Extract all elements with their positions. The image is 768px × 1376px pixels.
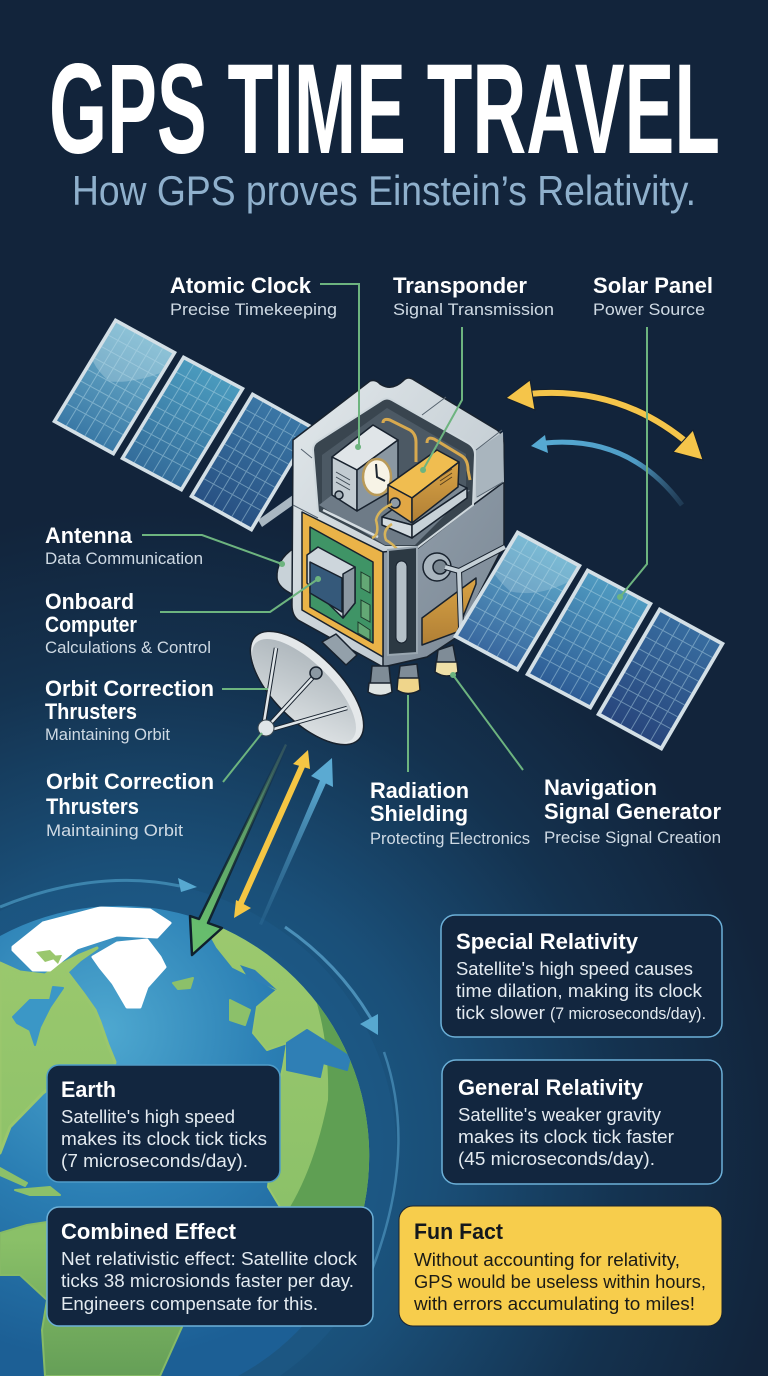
label: solar panel: [593, 273, 713, 319]
line: thrusters lower: [223, 733, 262, 782]
tube: [396, 561, 407, 643]
earth glow: [0, 510, 768, 1376]
panel: general relativity: [442, 1060, 722, 1184]
subtitle: How GPS proves Einstein’s Relativity.: [72, 167, 696, 214]
sea: baltic: [240, 965, 277, 990]
bay inner wall: [322, 408, 466, 505]
label: navigation signal generator: Navigation: [544, 775, 657, 800]
panel: fun fact: [399, 1206, 722, 1326]
label: antenna: [45, 523, 203, 568]
label: orbit correction thrusters lower: Maintaining Orbit: [46, 821, 183, 840]
circuit board: [302, 512, 383, 657]
dish: [232, 613, 382, 763]
panel: earth: makes its clock tick ticks: [61, 1128, 267, 1149]
body lower right face: [383, 482, 504, 667]
solar array: left: [52, 318, 315, 532]
rotation arrow: yellow: [506, 380, 703, 460]
land: arctic patches: [36, 950, 62, 964]
panel: combined effect: [47, 1207, 373, 1326]
onboard chip: [307, 547, 355, 618]
label: transponder: [393, 273, 554, 319]
panel: combined effect: Combined Effect: [61, 1219, 236, 1244]
panel: special relativity: (7 microseconds/day).: [550, 1004, 706, 1023]
land: shaded limb: [290, 1002, 370, 1206]
rotation arrow: blue: [531, 435, 682, 505]
panel: earth: Satellite's high speed: [61, 1106, 235, 1127]
connector: [390, 498, 400, 508]
clock face: [363, 459, 391, 495]
bay ledge: [323, 510, 378, 537]
label: navigation signal generator: Precise Signal Creation: [544, 828, 721, 847]
orbit arrow: top: [0, 878, 197, 907]
panel: fun fact: Fun Fact: [414, 1219, 503, 1244]
label: orbit correction thrusters upper: Thrusters: [45, 699, 137, 724]
leader dots: [279, 444, 623, 678]
label: onboard computer: Calculations & Control: [45, 638, 211, 657]
land: north america: [0, 948, 115, 1153]
line: navigation: [453, 675, 523, 770]
amber band: [422, 578, 476, 645]
label: antenna: Data Communication: [45, 549, 203, 568]
dish mount: [322, 634, 357, 665]
panel: special relativity: time dilation, making its clock: [456, 980, 703, 1001]
line: solar panel: [620, 327, 647, 597]
sea: mediterranean: [287, 1030, 350, 1077]
panel: special relativity: tick slower: [456, 1002, 545, 1023]
label: navigation signal generator: Signal Generator: [544, 799, 721, 824]
tube channel: [388, 547, 417, 655]
line: antenna: [142, 535, 282, 564]
label: solar panel: Power Source: [593, 300, 705, 319]
label: orbit correction thrusters lower: [46, 769, 214, 840]
gold pipes: [383, 419, 470, 480]
panel: general relativity: (45 microseconds/day).: [458, 1148, 655, 1169]
label: transponder: Signal Transmission: [393, 300, 554, 319]
panel: earth: [47, 1065, 280, 1182]
signal arrow: blue: [259, 758, 333, 925]
label: orbit correction thrusters upper: Orbit Correction: [45, 676, 214, 701]
cables: [372, 504, 403, 562]
panel: general relativity: makes its clock tick faster: [458, 1126, 674, 1147]
label: onboard computer: Onboard: [45, 589, 134, 614]
label: solar panel: Solar Panel: [593, 273, 713, 298]
panel: combined effect: Net relativistic effect: Satellite clock: [61, 1248, 358, 1269]
thrusters: [368, 645, 458, 696]
panel: special relativity: Satellite's high speed causes: [456, 958, 693, 979]
label: atomic clock: [170, 273, 337, 319]
signal arrow: green: [190, 744, 287, 955]
label: radiation shielding: Shielding: [370, 801, 468, 826]
label: transponder: Transponder: [393, 273, 527, 298]
antenna bulge: [277, 548, 294, 595]
atomic clock: [332, 425, 398, 511]
transponder platform: [382, 475, 467, 538]
panel seam details: [293, 397, 503, 518]
panel: fun fact: GPS would be useless within hours,: [414, 1271, 706, 1292]
sea: hudson bay: [13, 987, 63, 1045]
signal arrow: yellow: [234, 750, 310, 918]
label: radiation shielding: Radiation: [370, 778, 469, 803]
line: transponder: [423, 327, 462, 470]
land: islands: [0, 978, 250, 1195]
bracket: [423, 547, 505, 628]
label: radiation shielding: Protecting Electronics: [370, 829, 530, 848]
line: atomic clock: [320, 284, 359, 447]
label: orbit correction thrusters upper: [45, 676, 214, 744]
panel: general relativity: Satellite's weaker gravity: [458, 1104, 662, 1125]
line: thrusters upper: [222, 688, 268, 690]
panel: earth: Earth: [61, 1077, 116, 1102]
solar array: right: [453, 530, 725, 751]
label: orbit correction thrusters lower: Thrusters: [46, 794, 139, 819]
label: orbit correction thrusters upper: Maintaining Orbit: [45, 725, 170, 744]
panel: earth: (7 microseconds/day).: [61, 1150, 248, 1171]
bay interior: [313, 398, 475, 547]
orbit arc: lower: [372, 1052, 398, 1270]
ice: arctic: [13, 908, 170, 970]
label: orbit correction thrusters lower: Orbit Correction: [46, 769, 214, 794]
body shell: [292, 378, 504, 667]
label: radiation shielding: [370, 778, 530, 848]
orbit arrow: right: [285, 927, 378, 1035]
label: antenna: Antenna: [45, 523, 133, 548]
body upper right face: [476, 432, 504, 498]
label: onboard computer: [45, 589, 211, 657]
satellite: [52, 318, 725, 763]
label: onboard computer: Computer: [45, 612, 137, 637]
panel: special relativity: [441, 915, 722, 1037]
label: navigation signal generator: [544, 775, 721, 847]
land: south america: [0, 1222, 200, 1376]
panel: special relativity: Special Relativity: [456, 929, 638, 954]
leader lines: [142, 284, 647, 782]
earth: [0, 906, 370, 1376]
line: radiation shielding: [407, 695, 409, 772]
label: atomic clock: Precise Timekeeping: [170, 300, 337, 319]
transponder box: [388, 450, 459, 523]
line: onboard computer: [160, 579, 318, 612]
panel: combined effect: Engineers compensate for this.: [61, 1293, 318, 1314]
ice: greenland: [93, 940, 165, 1007]
bay floor: [319, 487, 470, 545]
panel: fun fact: with errors accumulating to miles!: [413, 1293, 695, 1314]
panel: fun fact: Without accounting for relativity,: [414, 1249, 680, 1270]
land: europe and africa: [212, 928, 370, 1206]
panel: general relativity: General Relativity: [458, 1075, 643, 1100]
label: atomic clock: Atomic Clock: [170, 273, 312, 298]
panel: combined effect: ticks 38 microsionds faster per day.: [61, 1270, 354, 1291]
